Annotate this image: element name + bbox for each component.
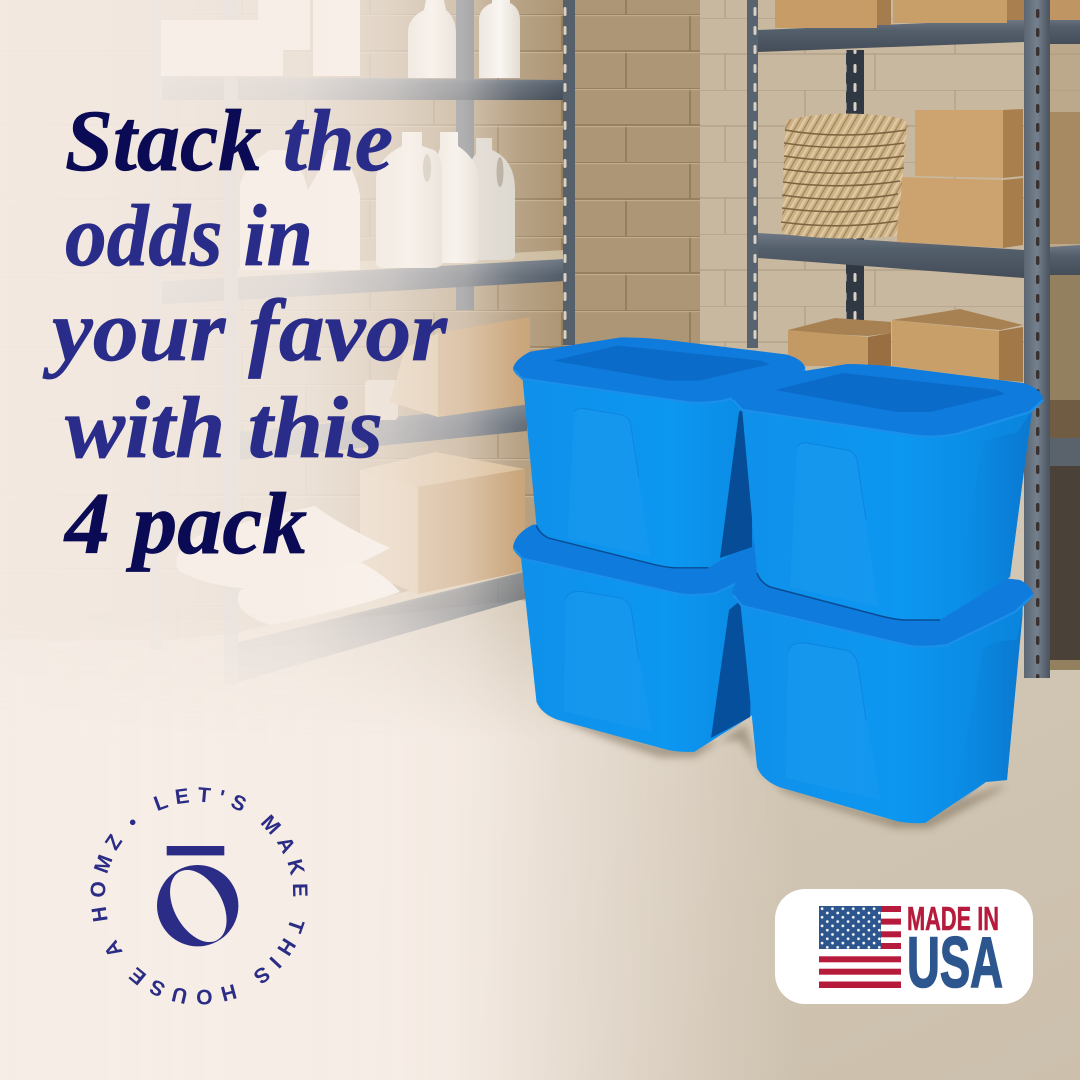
- cream fade overlay: [0, 0, 741, 1080]
- logo circular text: LET'S MAKE THIS HOUSE A HOMZ: [90, 787, 308, 1004]
- white pillows: [176, 506, 400, 625]
- white jugs and bottles: [161, 0, 520, 420]
- bin: front bottom: [732, 560, 1033, 823]
- bin: front top: [732, 364, 1043, 620]
- bin: back top: [513, 337, 805, 568]
- right shelving unit: [747, 0, 1080, 678]
- floor shadows beneath bins: [540, 705, 1005, 828]
- headline line 2: odds in: [65, 188, 313, 285]
- logo: circular badge: [90, 787, 308, 1004]
- made in text: MADE IN: [907, 900, 999, 937]
- cardboard boxes on left shelf: [360, 317, 530, 594]
- headline line 1: Stack the: [65, 93, 393, 190]
- made in usa badge: [775, 889, 1033, 1004]
- left shelving unit: [150, 0, 575, 685]
- headline line 5: 4 pack: [63, 476, 307, 573]
- logo mark: o with macron: [157, 846, 238, 952]
- coil of rope: [781, 113, 908, 239]
- bin: back bottom: [513, 518, 796, 752]
- headline: [43, 93, 448, 573]
- american flag: [819, 906, 901, 988]
- headline line 3: your favor: [43, 283, 448, 380]
- cardboard boxes on right shelf: [775, 0, 1080, 382]
- headline line 4: with this: [65, 380, 383, 477]
- usa text: USA: [907, 924, 1003, 1003]
